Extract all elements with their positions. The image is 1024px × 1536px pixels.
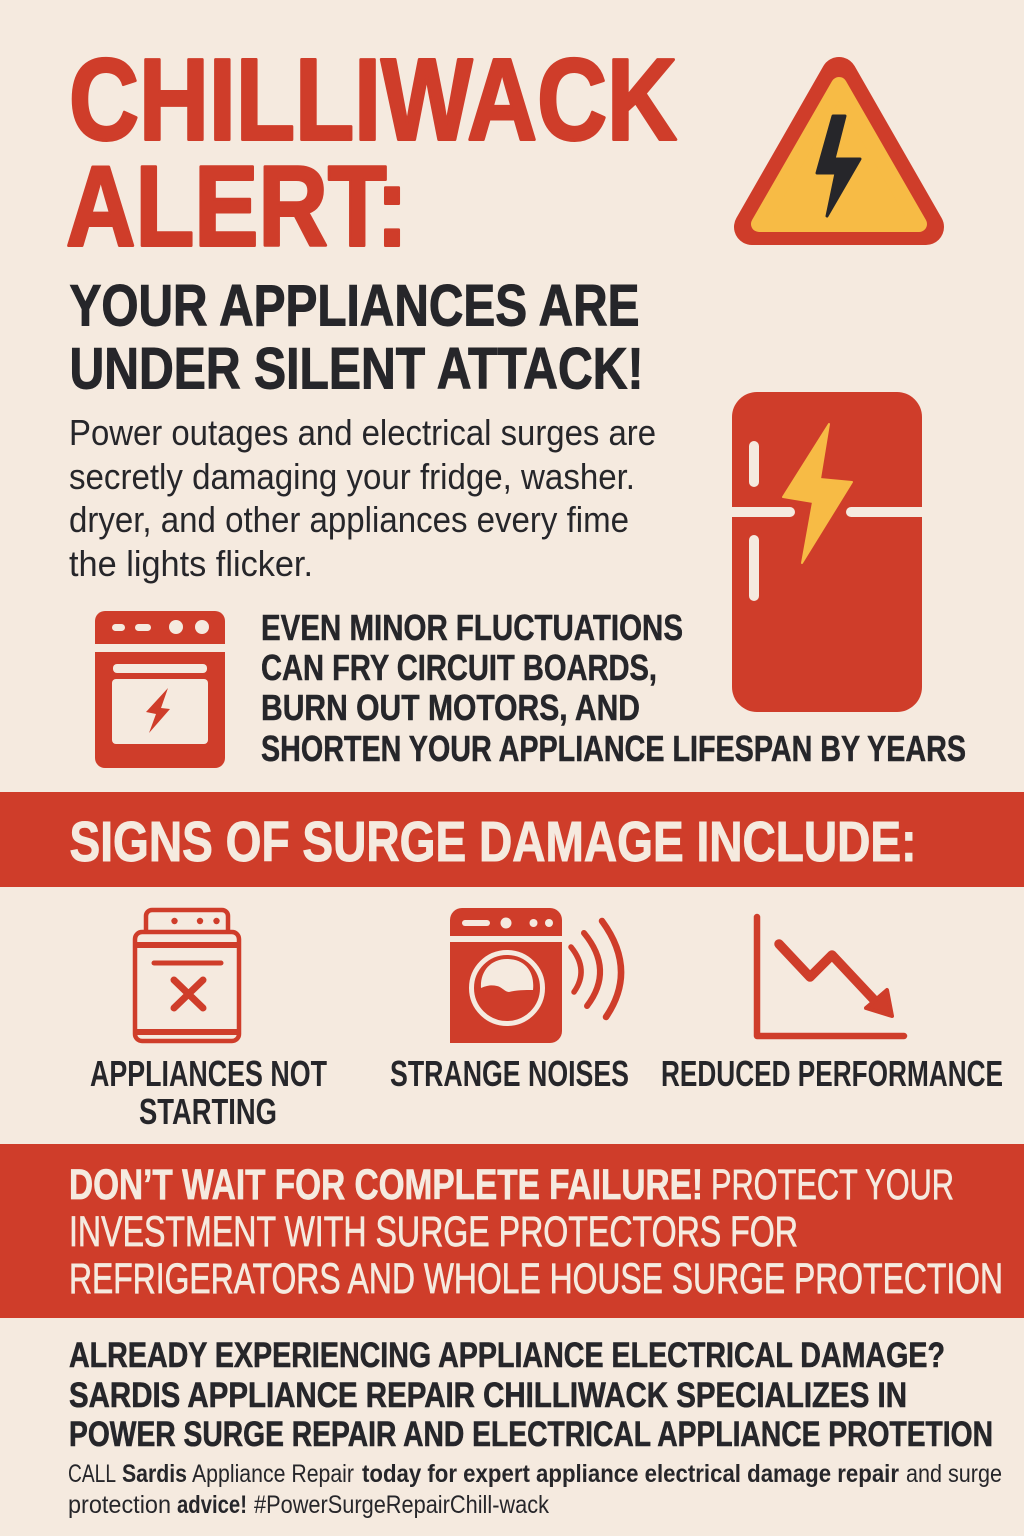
subheading bbox=[70, 274, 644, 402]
subheading: UNDER SILENT ATTACK! bbox=[70, 336, 644, 402]
banner: protect your investment: DON’T WAIT FOR COMPLETE FAILURE! bbox=[69, 1161, 703, 1209]
closing text: protection bbox=[68, 1491, 171, 1519]
closing text: Appliance Repair bbox=[192, 1460, 354, 1488]
closing text: #PowerSurgeRepairChill-wack bbox=[254, 1491, 549, 1519]
label: appliances not starting: STARTING bbox=[139, 1091, 277, 1132]
closing text: advice! bbox=[177, 1491, 247, 1519]
warning text bbox=[261, 607, 966, 769]
icon: washer with noise waves bbox=[450, 908, 621, 1043]
label: appliances not starting: APPLIANCES NOT bbox=[90, 1053, 327, 1094]
title: CHILLIWACK bbox=[69, 34, 677, 164]
closing text: and surge bbox=[906, 1460, 1002, 1488]
banner: protect your investment bbox=[0, 1144, 1024, 1318]
label: appliances not starting bbox=[90, 1053, 327, 1132]
title bbox=[66, 34, 677, 270]
warning text: CAN FRY CIRCUIT BOARDS, bbox=[261, 647, 657, 688]
warning text: BURN OUT MOTORS, AND bbox=[261, 687, 640, 728]
icon: fridge bbox=[732, 392, 922, 712]
icon: declining chart bbox=[757, 917, 904, 1036]
banner: protect your investment: INVESTMENT WITH SURGE PROTECTORS FOR bbox=[69, 1208, 798, 1256]
closing text: CALL bbox=[68, 1460, 116, 1488]
icon: warning triangle bbox=[752, 75, 926, 227]
closing text: Sardis bbox=[122, 1460, 187, 1488]
warning text: EVEN MINOR FLUCTUATIONS bbox=[261, 607, 683, 648]
closing text bbox=[68, 1460, 1002, 1519]
intro text: dryer, and other appliances every fime bbox=[69, 499, 629, 540]
intro text: Power outages and electrical surges are bbox=[69, 412, 656, 453]
label: strange noises: STRANGE NOISES bbox=[390, 1053, 629, 1094]
intro text: secretly damaging your fridge, washer. bbox=[69, 456, 635, 497]
banner: signs of surge damage bbox=[0, 792, 1024, 887]
icon: oven bbox=[95, 611, 225, 768]
closing text: today for expert appliance electrical damage repair bbox=[362, 1460, 899, 1488]
intro text: the lights flicker. bbox=[69, 543, 313, 584]
title: ALERT: bbox=[66, 144, 408, 270]
icon: appliance not starting bbox=[135, 910, 239, 1041]
subheading: YOUR APPLIANCES ARE bbox=[70, 274, 640, 338]
call to action heading bbox=[69, 1336, 993, 1454]
intro text bbox=[69, 412, 656, 584]
